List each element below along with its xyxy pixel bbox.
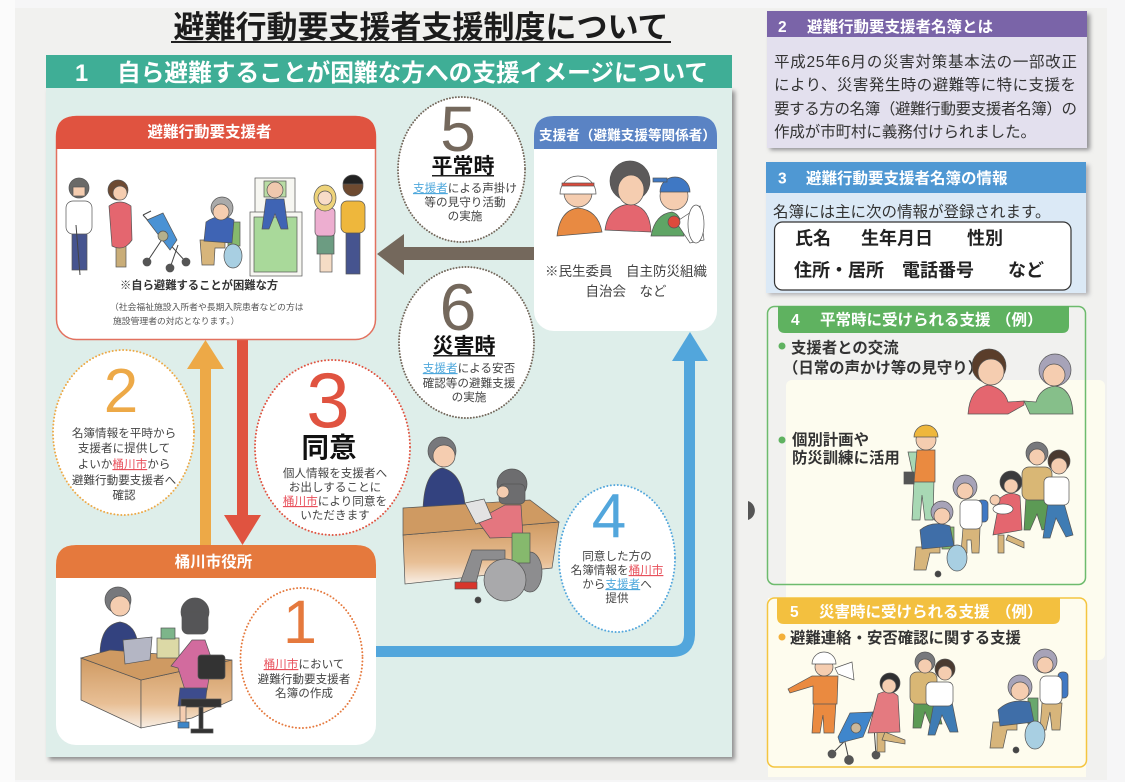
panel: section 2: 作成が市町村に義務付けられました。 — [774, 123, 1036, 141]
step 3: いただきます — [300, 509, 370, 522]
panel: section 2: 避難行動要支援者名簿とは — [807, 18, 993, 36]
panel: section 4: 支援者との交流 — [791, 339, 899, 357]
panel: section 5: 5 — [790, 604, 799, 621]
section 1 heading — [46, 55, 732, 88]
panel: section 4 — [768, 306, 1086, 584]
step 2: よいか桶川市から — [78, 457, 170, 471]
panel: section 2 — [767, 11, 1090, 150]
arrow: red down — [224, 340, 261, 545]
step 1: 1 — [283, 588, 317, 656]
step 4: 4 — [592, 482, 626, 551]
register fields box: など — [1008, 260, 1044, 280]
panel: people needing support: 施設管理者の対応となります。） — [113, 315, 239, 326]
icon: page turn marker — [748, 501, 755, 520]
step 6: 6 — [440, 270, 476, 344]
panel: people needing support: （社会福祉施設入所者や長期入院患者などの方は — [110, 301, 304, 312]
section 1 heading: 1 — [75, 61, 88, 87]
panel: city office — [56, 545, 376, 745]
illustration: disaster support — [788, 649, 1068, 764]
arrow: brown to people — [377, 234, 534, 275]
step 4: から支援者へ — [582, 577, 652, 591]
panel: supporters: ※民生委員 自主防災組織 — [545, 264, 707, 279]
step 2 — [53, 350, 194, 515]
panel: section 5: 災害時に受けられる支援 — [819, 602, 990, 621]
step 1: 桶川市において — [264, 657, 344, 671]
arrow: blue to supporters — [376, 361, 690, 652]
step 3: 桶川市により同意を — [283, 494, 387, 508]
step 3: 個人情報を支援者へ — [283, 466, 388, 480]
panel: section 2: 2 — [778, 19, 787, 36]
step 4: 同意した方の — [582, 549, 652, 563]
panel: section 4: 4 — [791, 312, 800, 329]
panel: section 3: 名簿には主に次の情報が登録されます。 — [773, 203, 1050, 221]
background: pale yellow sheet — [786, 380, 1105, 660]
step 1: 避難行動要支援者 — [258, 672, 350, 686]
panel: section 4: （例） — [996, 311, 1043, 329]
panel: section 5: 避難連絡・安否確認に関する支援 — [790, 628, 1021, 647]
step 5: 等の見守り活動 — [424, 195, 506, 209]
panel: section 4: 個別計画や — [792, 431, 869, 449]
register fields box — [774, 222, 1071, 290]
panel: people needing support — [56, 116, 376, 340]
panel: supporters: 自治会 など — [586, 284, 667, 299]
illustration: office counter — [81, 587, 232, 733]
panel: section 3: 3 — [778, 170, 787, 188]
panel: people needing support: 避難行動要支援者 — [147, 123, 272, 141]
step 5: 支援者による声掛け — [413, 181, 517, 195]
panel: section 2: により、災害発生時の避難等に特に支援を — [774, 76, 1076, 94]
panel: section 2: 平成25年6月の災害対策基本法の一部改正 — [774, 53, 1077, 71]
step 1: 名簿の作成 — [275, 686, 333, 700]
illustration: supporters — [557, 161, 704, 243]
step 4 — [559, 482, 675, 632]
step 5: の実施 — [448, 210, 483, 223]
section 1 heading: 自ら避難することが困難な方への支援イメージについて — [117, 59, 708, 87]
step 3 — [255, 356, 410, 535]
step 2: 避難行動要支援者へ — [72, 473, 177, 487]
illustration: people — [66, 175, 365, 276]
register fields box: 性別 — [967, 228, 1003, 248]
panel: people needing support: ※自ら避難することが困難な方 — [120, 278, 278, 292]
panel: section 3 — [766, 162, 1089, 295]
step 2: 名簿情報を平時から — [72, 426, 176, 440]
step 4: 名簿情報を桶川市 — [571, 563, 664, 577]
step 5: 平常時 — [432, 155, 494, 178]
register fields box: 生年月日 — [861, 228, 933, 248]
step 5: 5 — [440, 93, 476, 165]
step 6: 支援者による安否 — [423, 361, 516, 375]
title: 避難行動要支援者支援制度について — [173, 10, 669, 45]
step 6 — [399, 267, 534, 418]
panel: section 4: 平常時に受けられる支援 — [820, 310, 991, 329]
panel: section 5: （例） — [996, 603, 1043, 621]
step 2: 支援者に提供して — [78, 441, 170, 455]
panel: section 5 — [768, 598, 1086, 777]
panel: section 3: 避難行動要支援者名簿の情報 — [806, 168, 1008, 188]
panel: city office: 桶川市役所 — [175, 552, 253, 571]
arrow: blue head — [672, 332, 708, 361]
panel: supporters: 支援者（避難支援等関係者） — [539, 127, 716, 143]
register fields box: 住所・居所 — [794, 260, 884, 280]
register fields box: 氏名 — [795, 228, 831, 248]
panel: support image — [46, 55, 735, 760]
arrow: orange up — [187, 340, 224, 545]
step 4: 提供 — [605, 591, 629, 605]
step 6: の実施 — [452, 391, 487, 404]
illustration: consent interview — [403, 437, 559, 603]
step 6: 災害時 — [432, 335, 496, 358]
step 2: 確認 — [112, 488, 136, 502]
panel: section 4: 防災訓練に活用 — [792, 449, 900, 467]
step 6: 確認等の避難支援 — [423, 376, 516, 390]
step 5 — [398, 93, 525, 242]
step 1 — [240, 588, 362, 728]
step 3: 同意 — [302, 432, 356, 463]
illustration: evacuation drill — [904, 425, 1073, 577]
panel: supporters — [534, 116, 717, 331]
step 3: お出しすることに — [289, 481, 381, 494]
panel: section 2: 要する方の名簿（避難行動要支援者名簿）の — [774, 100, 1077, 118]
step 2: 2 — [104, 357, 138, 426]
register fields box: 電話番号 — [902, 260, 974, 280]
step 3: 3 — [306, 356, 350, 444]
illustration: daily check-in — [968, 349, 1073, 414]
panel: section 4: （日常の声かけ等の見守り） — [783, 358, 983, 377]
